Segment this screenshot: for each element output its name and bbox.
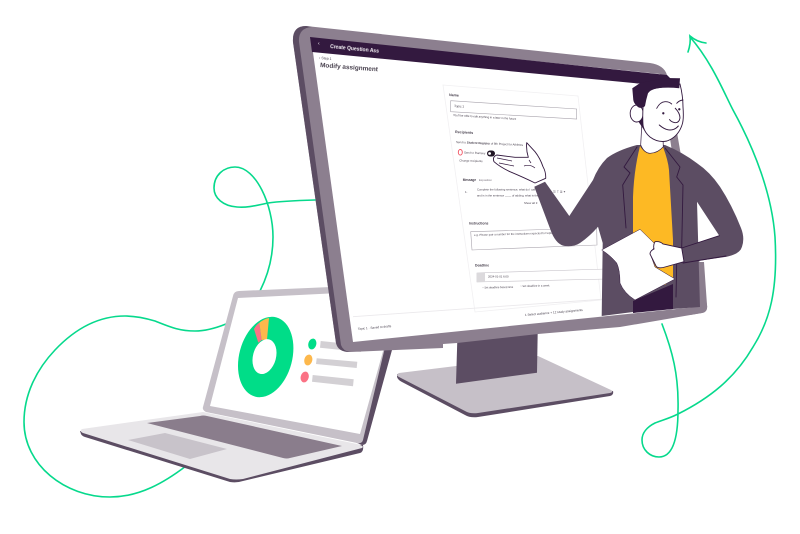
smile — [659, 125, 678, 130]
page title: Modify assignment — [320, 62, 379, 73]
donut hole — [249, 336, 280, 377]
legend bar 3 — [312, 375, 354, 386]
white gap between arm and body — [682, 201, 720, 249]
jacket front line — [675, 263, 678, 297]
recipient name: Send to Ramsey — [464, 151, 486, 155]
recipients section — [455, 130, 524, 163]
instructions section — [469, 222, 597, 250]
instructions box — [471, 228, 597, 250]
message line 2: and is in the sentence ____ of adding, what is the — [477, 194, 539, 198]
curve: loop left of monitor — [214, 167, 315, 291]
header band — [310, 37, 672, 84]
trousers — [633, 284, 673, 313]
donut main segment — [229, 311, 302, 403]
toggle switch — [487, 150, 495, 156]
name input — [451, 101, 577, 119]
legend dot: orange — [303, 354, 314, 366]
recipients description: Send to Student Registry of 8th Project for Athletes — [456, 140, 524, 147]
back hair — [636, 118, 646, 130]
show all link: Show all 3 — [524, 201, 538, 205]
paper sheet — [602, 229, 675, 300]
footer left text: Topic 1 · Saved to drafts — [358, 324, 392, 331]
deadline icon cell — [477, 273, 485, 282]
step link: ‹ Step 1 — [319, 56, 332, 61]
name label: Name — [449, 93, 459, 98]
instructions placeholder: e.g. Please pair a number for the instructions expected for topic #1 — [474, 231, 557, 237]
deadline option 2: ◔ Set deadline in a week — [520, 283, 550, 288]
footer divider — [353, 299, 606, 317]
ear — [630, 105, 643, 122]
eyes — [663, 109, 679, 113]
laptop lid back edge — [350, 345, 392, 445]
message tab: Exposition — [479, 178, 492, 182]
laptop base lip — [80, 431, 363, 482]
head — [630, 78, 683, 142]
laptop — [80, 284, 400, 482]
toggle track — [487, 150, 495, 156]
open pointing hand — [493, 143, 546, 183]
laptop screen — [210, 290, 400, 434]
legend bar 1 — [320, 341, 362, 352]
name section — [449, 93, 577, 121]
fingers and palm creases — [497, 158, 535, 168]
palm — [493, 143, 546, 183]
monitor screen — [311, 38, 696, 342]
holding hand — [650, 242, 684, 268]
cuff line — [682, 236, 726, 263]
donut chart — [229, 311, 302, 403]
name value: Topic 1 — [454, 104, 464, 109]
monitor — [293, 26, 707, 352]
stand base lip — [397, 374, 613, 417]
deadline label: Deadline — [475, 264, 489, 268]
deadline section — [475, 264, 606, 289]
icon: red recipient — [458, 150, 462, 155]
instructions label: Instructions — [469, 222, 489, 226]
deadline option 1: ◔ Set deadline based time — [482, 285, 514, 289]
message number: 1. — [465, 190, 468, 194]
message section — [463, 178, 566, 205]
change recipients link: Change recipients — [459, 159, 483, 163]
donut pink segment — [254, 323, 262, 343]
right lapel — [665, 148, 683, 248]
frame sliver beside jacket — [690, 262, 707, 315]
message line 1: Complete the following sentence, what do I call — [477, 188, 536, 192]
laptop base — [81, 412, 363, 480]
deadline input — [477, 269, 606, 282]
screen header bar — [310, 37, 672, 84]
card outline — [443, 85, 601, 312]
neck — [641, 126, 663, 153]
message toolbar: ≡ ☰ T ≣ ▾ — [550, 186, 566, 194]
toggle knob — [488, 152, 491, 155]
jacket lapel lines — [623, 147, 726, 297]
stand base — [397, 356, 612, 413]
presenter character — [493, 78, 743, 316]
legend dot: pink — [299, 371, 310, 383]
curve: arrow line right of monitor — [642, 37, 776, 457]
screen page heading — [319, 56, 379, 73]
message label: Message — [463, 178, 476, 182]
monitor frame — [293, 26, 707, 352]
curve: loop around laptop — [24, 316, 226, 497]
nose — [669, 108, 680, 123]
jacket — [534, 145, 743, 316]
yellow shirt — [633, 146, 673, 285]
icon: arrowhead — [688, 36, 706, 52]
legend dot: green — [307, 338, 318, 350]
footer right text: 1 Select audience + 12 study assignments — [525, 308, 583, 317]
laptop trackpad — [128, 433, 227, 459]
monitor left dark edge — [293, 26, 350, 352]
hair — [632, 78, 680, 108]
donut orange segment — [259, 318, 269, 340]
monitor stand — [397, 332, 613, 417]
header title: Create Question Ass — [330, 44, 379, 55]
name hint: You'll be able to edit anything in a later in the future — [453, 113, 517, 121]
eyebrows — [657, 100, 683, 108]
left lapel — [623, 147, 637, 228]
recipients label: Recipients — [455, 130, 473, 135]
chart legend — [299, 338, 362, 386]
laptop lid — [203, 284, 400, 443]
stand neck — [456, 332, 538, 384]
face — [643, 84, 683, 142]
laptop keyboard — [147, 416, 342, 458]
screen footer — [353, 299, 606, 331]
deadline value: 2024-01-01 6:00 — [488, 274, 509, 278]
header back glyph: ‹ — [318, 41, 320, 47]
legend bar 2 — [316, 358, 357, 368]
assignment form card — [443, 85, 606, 312]
